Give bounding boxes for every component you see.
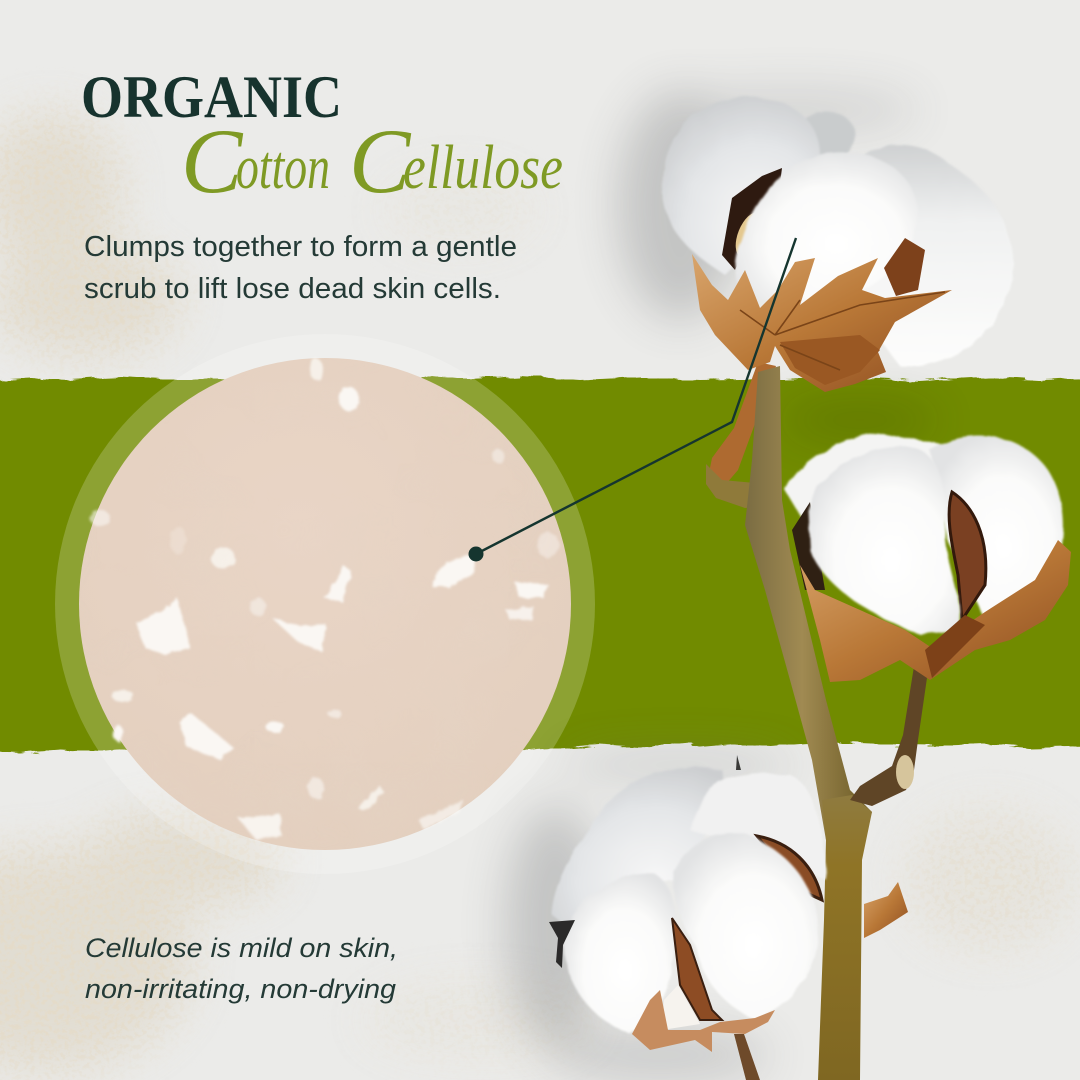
heading: Cotton Cellulose: ellulose <box>403 134 563 202</box>
circle ring <box>55 334 595 874</box>
main stem <box>745 366 872 840</box>
cotton boll: middle <box>785 433 1071 682</box>
dark seed pocket <box>722 168 782 270</box>
description text: Clumps together to form a gentle <box>84 231 517 263</box>
small leaf right of the stem <box>864 882 908 938</box>
back segments <box>785 433 1063 620</box>
lower stalk <box>734 1034 760 1080</box>
dark pocket left <box>792 502 825 590</box>
heading: Cotton Cellulose: C <box>349 110 412 212</box>
callout dot <box>468 546 484 562</box>
title block <box>81 64 563 212</box>
footnote text: non-irritating, non-drying <box>85 974 396 1004</box>
cotton boll: bottom <box>549 755 826 1052</box>
footnote text: Cellulose is mild on skin, <box>85 933 398 963</box>
boll back segments <box>662 97 1013 366</box>
boll front segment <box>735 152 917 305</box>
seed pocket <box>757 836 822 900</box>
right branch: middle boll <box>850 660 929 806</box>
back segments <box>552 766 826 925</box>
branch node <box>706 464 770 508</box>
heading: Cotton Cellulose: C <box>181 110 244 212</box>
branch cut end <box>896 755 914 789</box>
pale seed <box>730 208 770 262</box>
side branch: top boll <box>708 362 776 484</box>
front centre segment <box>673 833 818 1020</box>
skin mottling <box>542 488 543 489</box>
cellulose flakes <box>90 358 559 840</box>
callout leader line <box>468 238 796 562</box>
spike tip <box>736 755 741 770</box>
skin close-up <box>79 358 571 850</box>
front left segment <box>564 873 675 1034</box>
green torn band <box>0 375 1080 753</box>
lower bracts <box>632 990 775 1052</box>
magnified skin circle <box>55 334 595 874</box>
heading: Cotton Cellulose: otton <box>236 134 330 202</box>
brown bract pocket <box>672 918 722 1020</box>
heading: ORGANIC: ORGANIC <box>81 64 342 130</box>
bracts <box>800 540 1071 682</box>
bract fold and veins <box>740 292 945 385</box>
bracts <box>692 254 952 392</box>
cast shadows of the cotton plant <box>505 88 940 1080</box>
pale inner segment <box>662 985 700 1030</box>
lower stem <box>818 795 872 1080</box>
brown bract <box>884 238 925 296</box>
cotton plant <box>706 362 929 1080</box>
seed pocket <box>949 492 986 620</box>
dark bract fold <box>925 615 985 678</box>
black spike <box>549 920 575 968</box>
description text: scrub to lift lose dead skin cells. <box>84 273 501 305</box>
front segment <box>808 447 960 634</box>
cotton boll: top <box>662 97 1013 392</box>
